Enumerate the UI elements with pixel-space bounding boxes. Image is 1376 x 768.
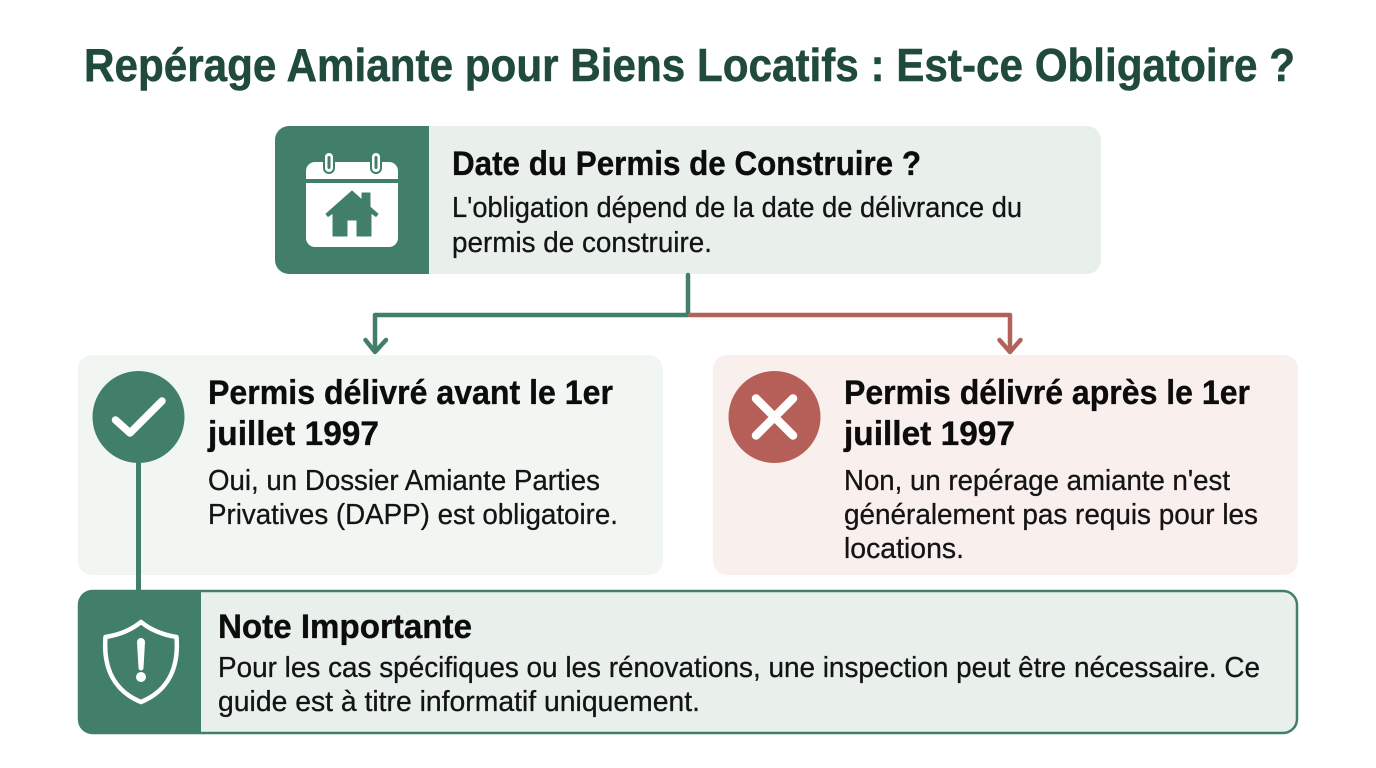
- text: after 1997 description: généralement pas requis pour les: [844, 499, 1258, 531]
- arrow: red branch to after 1997: [690, 315, 1020, 352]
- text: after 1997 description: Non, un repérage amiante n'est: [844, 465, 1230, 497]
- panel: important note: [78, 590, 1297, 734]
- text: permit date description: permis de construire.: [452, 227, 712, 259]
- text: important note description: Pour les cas spécifiques ou les rénovations, une inspection peut être nécessaire. Ce: [218, 652, 1260, 684]
- title: Repérage Amiante pour Biens Locatifs : Est-ce Obligatoire ?: [84, 39, 1295, 91]
- panel: permit after 1 July 1997: [713, 355, 1298, 575]
- text: permit date description: [452, 192, 1022, 259]
- heading: before 1997: Permis délivré avant le 1er: [208, 374, 613, 412]
- icon: shield with exclamation mark: [105, 622, 177, 702]
- heading: after 1997: Permis délivré après le 1er: [844, 374, 1250, 412]
- panel: building permit date question: [275, 126, 1101, 274]
- text: before 1997 description: Oui, un Dossier Amiante Parties: [208, 465, 600, 497]
- panel: permit before 1 July 1997: [78, 355, 663, 575]
- text: after 1997 description: [844, 465, 1258, 565]
- text: permit date description: L'obligation dépend de la date de délivrance du: [452, 192, 1022, 224]
- text: before 1997 description: Privatives (DAPP) est obligatoire.: [208, 499, 618, 531]
- heading: before 1997: juillet 1997: [207, 415, 379, 453]
- text: important note description: [218, 652, 1260, 718]
- text: before 1997 description: [208, 465, 618, 531]
- heading: before 1997: [207, 374, 613, 453]
- icon: calendar with house: [306, 151, 398, 247]
- connector: check icon to note: [136, 455, 141, 595]
- icon: green check circle: [92, 371, 184, 463]
- heading: permit date: Date du Permis de Construire ?: [452, 145, 921, 183]
- heading: after 1997: juillet 1997: [843, 415, 1015, 453]
- heading: important note: Note Importante: [218, 608, 472, 646]
- text: after 1997 description: locations.: [844, 533, 964, 565]
- arrow: green branch to before 1997: [366, 275, 688, 352]
- text: important note description: guide est à titre informatif uniquement.: [218, 686, 700, 718]
- heading: after 1997: [843, 374, 1250, 453]
- icon: red cross circle: [728, 371, 820, 463]
